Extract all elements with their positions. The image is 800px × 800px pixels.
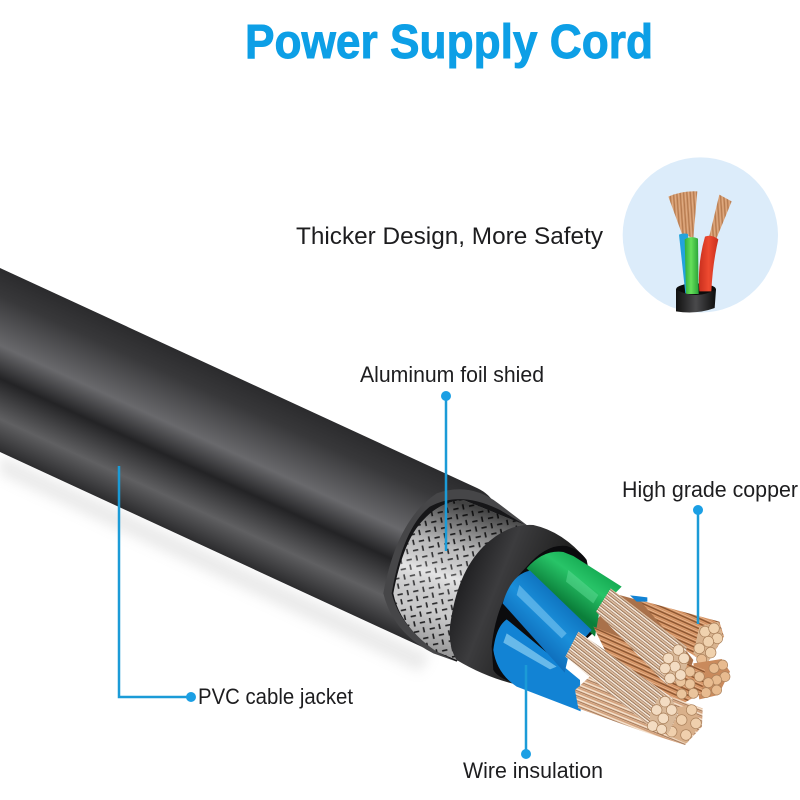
callout: PVC jacket	[119, 466, 353, 709]
callout: copper: High grade copper	[622, 477, 798, 502]
callout: wire insulation: Wire insulation	[463, 758, 603, 783]
callout: copper	[622, 477, 798, 624]
callout: PVC jacket: PVC cable jacket	[198, 684, 353, 709]
callout: aluminum foil	[360, 362, 544, 551]
icon: red wire	[699, 236, 718, 291]
copper bundle from lower blue wire	[575, 673, 703, 745]
tagline: Thicker Design, More Safety	[296, 223, 603, 250]
callout: wire insulation	[463, 665, 603, 783]
title: Power Supply Cord	[245, 16, 653, 69]
sheath opening	[492, 546, 600, 687]
inner sheath	[450, 525, 587, 687]
copper back bundle	[630, 595, 724, 664]
icon: green wire	[685, 237, 699, 294]
copper bundle from upper blue wire	[565, 632, 678, 734]
icon: wire badge	[623, 157, 778, 313]
green wire	[527, 552, 622, 637]
cable jacket shadow	[0, 455, 430, 672]
icon: sheath opening	[676, 283, 716, 295]
upper blue wire	[503, 571, 592, 673]
aluminum foil shield	[393, 500, 533, 660]
cable cross-section	[383, 489, 730, 745]
jacket cut ring	[383, 489, 533, 662]
PVC cable jacket	[0, 268, 495, 655]
icon: black sheath	[676, 289, 716, 312]
lower blue wire	[493, 619, 581, 711]
copper far-right bundle	[693, 659, 730, 699]
callout: aluminum foil: Aluminum foil shied	[360, 362, 544, 387]
copper core fill	[593, 593, 693, 703]
icon: copper fans	[668, 191, 732, 238]
copper middle bundle	[593, 627, 705, 705]
copper bundle from green wire	[596, 588, 689, 685]
icon: blue wire	[679, 233, 690, 293]
